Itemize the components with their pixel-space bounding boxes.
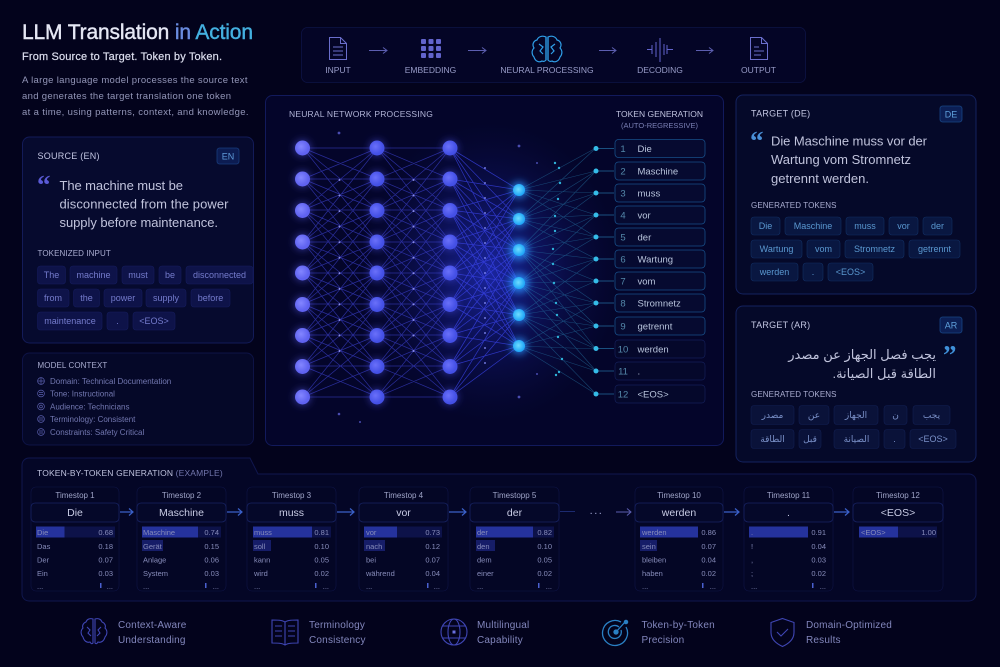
timestep 1 (31, 487, 119, 591)
timestep 5: 0.10 (537, 542, 552, 551)
German translation: Wartung vom Stromnetz (771, 152, 911, 167)
timestep 10: 0.86 (701, 528, 716, 537)
source text: The machine must be (60, 178, 183, 193)
token generation list: 3 (620, 188, 626, 200)
timestep 12: Timestop 12 (876, 491, 920, 500)
timestep 3: ... (323, 582, 329, 591)
icon: book (272, 620, 298, 645)
token generation list: <EOS> (638, 390, 669, 400)
timestep 3 (247, 487, 336, 591)
arrow (449, 508, 466, 516)
context list: Domain: Technical Documentation (50, 377, 171, 386)
panel: source (22, 137, 254, 343)
token chips: <EOS> (918, 434, 948, 444)
timestep 3: muss (279, 507, 304, 519)
timestep 11: ! (751, 542, 753, 551)
timestep 2 (137, 487, 226, 591)
arrow (696, 48, 713, 54)
timestep 5: Timestopp 5 (493, 491, 537, 500)
panel: pipeline (302, 28, 806, 82)
timestep 5 (470, 487, 559, 591)
token chips: . (893, 434, 896, 444)
timestep 3: ... (254, 582, 260, 591)
heading: TOKEN-BY-TOKEN GENERATION (EXAMPLE) (37, 468, 223, 478)
token chips: ن (892, 410, 899, 420)
timestep 11: 0.02 (811, 569, 826, 578)
timestep 5: dem (477, 556, 492, 564)
icon: target (603, 620, 628, 645)
timestep 3: 0.10 (314, 542, 329, 551)
ellipsis connector: ... (590, 505, 603, 517)
timestep 10: sein (642, 542, 656, 551)
timestep 1: ... (37, 582, 43, 591)
feature: domain-optimized results: Domain-Optimized (806, 620, 892, 631)
Arabic translation: يجب فصل الجهاز عن مصدر (787, 347, 936, 363)
token chips: <EOS> (836, 267, 865, 277)
icon: embedding grid (421, 39, 441, 58)
source label: SOURCE (EN) (38, 151, 100, 161)
timestep 4: 0.04 (425, 569, 440, 578)
hidden layer 1 nodes (369, 140, 385, 405)
feature: context-aware understanding: Understanding (118, 635, 186, 646)
token generation list: der (638, 232, 651, 244)
timestep 11: ; (751, 569, 753, 578)
timestep 4: Timestop 4 (384, 491, 424, 500)
token chips (38, 266, 253, 330)
timestep 2: 0.06 (204, 556, 219, 564)
timestep 4: ... (434, 582, 440, 591)
feature: domain-optimized results (771, 618, 892, 646)
label: input: INPUT (325, 65, 351, 75)
token generation list: 5 (620, 232, 626, 244)
arrow (834, 508, 849, 516)
timestep 10: 0.04 (701, 556, 716, 564)
timestep 3: kann (254, 556, 270, 564)
token chips: Die (759, 221, 772, 231)
language badge EN (217, 148, 239, 164)
timestep 4: 0.12 (425, 542, 440, 551)
arrow (369, 48, 387, 54)
timestep 10: haben (642, 569, 663, 578)
token generation list: 12 (618, 390, 628, 400)
timestep 5: 0.82 (537, 528, 552, 537)
token chips: مصدر (761, 410, 784, 420)
timestep 5: der (477, 528, 488, 537)
token generation list: 7 (620, 276, 626, 288)
token chips: vom (815, 244, 832, 254)
timestep 2: 0.03 (204, 569, 219, 578)
tokenized input label: TOKENIZED INPUT (38, 249, 111, 258)
German translation (771, 134, 928, 186)
panel: token-by-token generation (22, 458, 976, 601)
token generation list: vor (638, 210, 651, 222)
timestep 1: 0.03 (98, 569, 113, 578)
token generation list: . (638, 366, 640, 378)
hidden layer 2 nodes (442, 140, 458, 405)
token generation list: 4 (620, 210, 626, 222)
timestep 3: Timestop 3 (272, 491, 312, 500)
feature: token-by-token precision: Precision (642, 635, 684, 646)
token chips: supply (153, 293, 180, 303)
generated tokens label: GENERATED TOKENS (751, 201, 837, 210)
label: embedding: EMBEDDING (405, 65, 456, 75)
context list: Tone: Instructional (50, 390, 115, 398)
timestep 3: muss (254, 528, 272, 537)
heading: token generation: TOKEN GENERATION (616, 109, 703, 119)
description (22, 75, 248, 118)
ellipsis connector (560, 505, 631, 517)
title: LLM Translation in Action (22, 21, 253, 44)
feature: domain-optimized results: Results (806, 635, 841, 646)
generated tokens label: GENERATED TOKENS (751, 390, 837, 399)
timestep 4: ... (366, 582, 372, 591)
target DE label: TARGET (DE) (751, 108, 810, 118)
token chips: عن (808, 410, 820, 420)
quote mark: “ (37, 170, 50, 200)
feature: context-aware understanding (81, 619, 187, 646)
token chips: الصيانة (844, 434, 869, 444)
token chips: getrennt (918, 244, 952, 254)
timestep 11: ... (820, 582, 826, 591)
Arabic translation: الطاقة قبل الصيانة. (832, 366, 936, 381)
description: and generates the target translation one token (22, 91, 231, 102)
icon: output document (750, 38, 768, 60)
timestep 5: 0.02 (537, 569, 552, 578)
token generation list: 8 (620, 298, 626, 310)
timestep 1: Der (37, 556, 50, 564)
context list: Constraints: Safety Critical (50, 428, 144, 437)
feature: token-by-token precision: Token-by-Token (642, 620, 715, 631)
timestep 2: 0.15 (204, 542, 219, 551)
heading: neural network processing: NEURAL NETWORK PROCESSING (289, 109, 433, 119)
timestep 2: Maschine (143, 528, 175, 537)
context list: Terminology: Consistent (50, 415, 136, 424)
token generation list: 6 (620, 254, 626, 266)
feature: multilingual capability: Capability (477, 635, 523, 646)
token chips: the (80, 293, 93, 303)
arrow (724, 508, 739, 516)
timestep 3: wird (253, 569, 268, 578)
token chips: Stromnetz (854, 244, 896, 254)
token chips: der (931, 221, 944, 231)
token chips: قبل (803, 434, 817, 444)
language badge AR (940, 317, 962, 333)
timestep 1: Ein (37, 569, 48, 578)
timestep 10: 0.07 (701, 542, 716, 551)
timestep 5: ... (546, 582, 552, 591)
token generation list: getrennt (638, 322, 673, 332)
icon: brain (532, 36, 562, 62)
feature: token-by-token precision (603, 620, 715, 646)
timestep 5: der (507, 507, 523, 519)
timestep 2: Gerät (143, 542, 163, 551)
model context heading: MODEL CONTEXT (38, 361, 107, 370)
timestep 1: 0.18 (98, 542, 113, 551)
token generation list: 11 (618, 366, 628, 378)
arrow (468, 48, 486, 54)
timestep 12 (853, 487, 943, 591)
Arabic translation (787, 347, 936, 381)
timestep 1: Die (67, 507, 83, 519)
source text (60, 178, 229, 230)
icon: input document (330, 38, 346, 60)
token chips: must (128, 270, 148, 280)
output layer nodes (509, 182, 529, 354)
token chips: الجهاز (844, 410, 867, 420)
token chips: يجب (923, 410, 941, 420)
token generation list: 1 (620, 144, 626, 155)
timestep 3: 0.02 (314, 569, 329, 578)
token chips: Maschine (794, 221, 832, 231)
token chips: vor (897, 221, 910, 231)
input layer nodes (294, 140, 310, 405)
timestep 10: ... (710, 582, 716, 591)
neural network diagram (294, 122, 620, 423)
panel: target DE (736, 95, 976, 294)
quote mark: “ (750, 126, 764, 156)
timestep 3: soll (254, 542, 266, 551)
token generation list: 10 (618, 344, 628, 356)
timestep 11 (744, 487, 833, 591)
feature: multilingual capability: Multilingual (477, 620, 529, 631)
timestep 5: den (477, 542, 490, 551)
timestep 10: bleiben (642, 556, 666, 564)
source text: supply before maintenance. (60, 215, 218, 230)
token chips (751, 406, 956, 448)
timestep 11: Timestop 11 (767, 491, 811, 500)
language badge AR: AR (945, 320, 958, 330)
context list: Audience: Technicians (50, 402, 129, 412)
timestep 4: während (365, 569, 395, 578)
timestep 2: Maschine (159, 507, 204, 519)
timestep 2: 0.74 (204, 528, 219, 537)
timestep 11: , (751, 556, 753, 564)
feature: terminology consistency: Terminology (309, 620, 365, 631)
token chips: muss (854, 221, 876, 231)
token generation list: muss (638, 188, 660, 200)
token chips: The (44, 270, 59, 280)
panel: neural network (266, 96, 724, 446)
German translation: getrennt werden. (771, 171, 869, 186)
timestep 2: ... (143, 582, 149, 591)
token chips: . (812, 267, 814, 277)
token generation list: 9 (620, 322, 626, 332)
quote mark: ” (943, 340, 956, 370)
token generation list: werden (636, 344, 669, 356)
heading: token generation (616, 109, 703, 130)
token chips: . (116, 316, 119, 326)
timestep 11: . (751, 528, 753, 537)
token chips: machine (76, 270, 111, 280)
timestep 10: 0.02 (701, 569, 716, 578)
token generation list: Stromnetz (638, 298, 681, 310)
label: output: OUTPUT (741, 65, 776, 75)
feature: context-aware understanding: Context-Aware (118, 620, 187, 631)
timestep 3: 0.05 (314, 556, 329, 564)
arrow (227, 508, 242, 516)
token generation list: 2 (620, 166, 626, 178)
timestep 2: System (143, 569, 168, 578)
label: decoding: DECODING (637, 65, 683, 75)
token chips: <EOS> (139, 316, 169, 326)
timestep 10: werden (641, 528, 667, 537)
token chips: Wartung (760, 244, 793, 254)
token generation list: Maschine (638, 166, 678, 178)
context list (38, 377, 171, 437)
timestep 5: ... (477, 582, 483, 591)
timestep 4: vor (396, 507, 411, 519)
token generation list (615, 140, 705, 403)
timestep 2: Timestop 2 (162, 491, 202, 500)
panel: target AR (736, 306, 976, 462)
timestep 1: Die (37, 528, 48, 537)
arrow (337, 508, 354, 516)
heading: token generation: (AUTO-REGRESSIVE) (621, 121, 698, 130)
token chips: الطاقة (760, 434, 785, 444)
timestep 12: <EOS> (861, 528, 886, 537)
timestep 1: 0.07 (98, 556, 113, 564)
subtitle: From Source to Target. Token by Token. (22, 51, 222, 63)
timestep 1: Das (37, 542, 51, 551)
timestep 4: 0.73 (425, 528, 440, 537)
timestep 11: 0.04 (811, 542, 826, 551)
timestep 2: Anlage (143, 556, 166, 564)
icon: brain (81, 619, 107, 644)
token generation list: Die (638, 144, 652, 155)
timestep 11: 0.03 (811, 556, 826, 564)
timestep 3: 0.81 (314, 528, 329, 537)
token dots (594, 146, 598, 396)
token chips: before (198, 293, 223, 303)
label: neural processing: NEURAL PROCESSING (500, 65, 594, 75)
token chips: power (111, 293, 135, 303)
timestep 2: ... (213, 582, 219, 591)
language badge DE: DE (945, 110, 957, 120)
token chips: from (44, 293, 62, 303)
token chips: be (165, 270, 175, 280)
timestep 4: bei (366, 556, 376, 564)
token generation list: vom (638, 276, 656, 288)
feature: terminology consistency (272, 620, 366, 646)
token chips: maintenance (44, 316, 96, 326)
icon: shield (771, 618, 794, 646)
arrow (120, 508, 133, 516)
feature: terminology consistency: Consistency (309, 635, 366, 646)
timestep 1: Timestop 1 (55, 491, 95, 500)
timestep 1: 0.68 (98, 528, 113, 537)
timestep 4: nach (366, 542, 382, 551)
timestep 10: ... (642, 582, 648, 591)
timestep 5: einer (477, 569, 494, 578)
token chips: disconnected (193, 270, 246, 280)
description: A large language model processes the source text (22, 75, 248, 86)
timestep 11: . (787, 507, 790, 519)
language badge EN: EN (222, 152, 234, 162)
target AR label: TARGET (AR) (751, 320, 810, 330)
panel: model context (22, 353, 254, 445)
token generation list: Wartung (638, 254, 673, 266)
timestep 11: 0.91 (811, 528, 826, 537)
German translation: Die Maschine muss vor der (771, 134, 928, 148)
timestep 1: ... (107, 582, 113, 591)
timestep 4 (359, 487, 448, 591)
timestep 10: Timestop 10 (657, 491, 701, 500)
icon: globe (441, 619, 467, 645)
timestep 12: <EOS> (881, 507, 915, 519)
timestep 4: 0.07 (425, 556, 440, 564)
timestep 5: 0.05 (537, 556, 552, 564)
timestep 11: ... (751, 582, 757, 591)
token chips: werden (759, 267, 789, 277)
token chips (751, 217, 960, 281)
source text: disconnected from the power (60, 196, 229, 212)
description: at a time, using patterns, context, and knowledge. (22, 107, 248, 118)
timestep 10: werden (661, 507, 696, 519)
timestep 10 (635, 487, 723, 591)
timestep 12: 1.00 (921, 528, 936, 537)
timestep 4: vor (366, 528, 377, 537)
icon: decoding waveform (647, 38, 673, 62)
feature: multilingual capability (441, 619, 529, 646)
language badge DE (940, 106, 962, 122)
arrow (599, 48, 616, 54)
